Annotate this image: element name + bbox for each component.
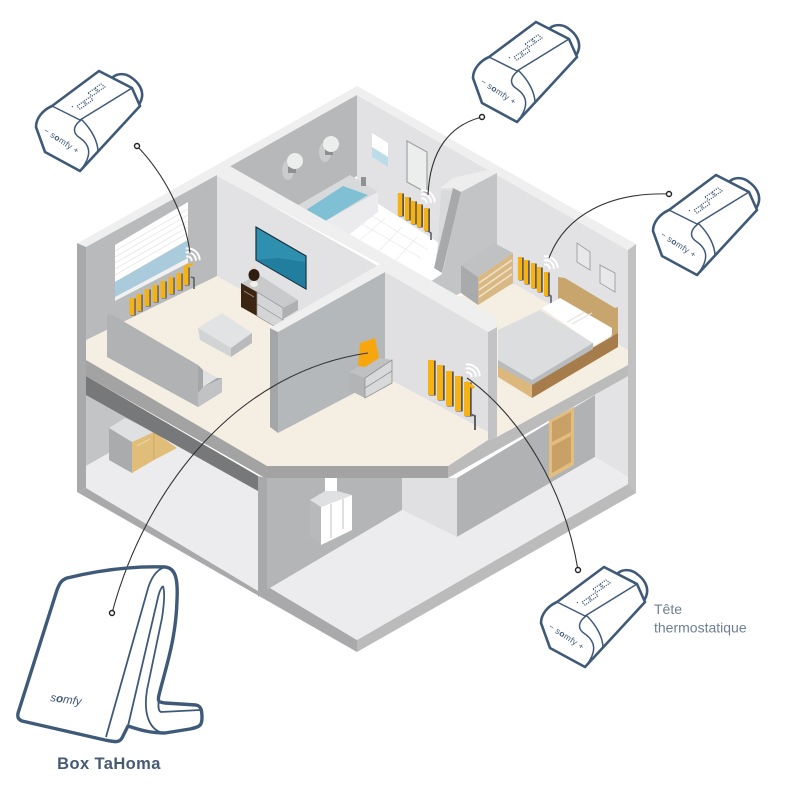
label: thermostatic head: thermostatique bbox=[654, 620, 747, 636]
icon: thermostatic head, top left bbox=[36, 71, 142, 171]
tv stand and lamp bbox=[241, 267, 298, 333]
bathroom window bbox=[372, 133, 388, 167]
lower storey bbox=[77, 375, 636, 652]
icon: TaHoma box: somfy bbox=[50, 692, 83, 709]
label: thermostatic head: Tête bbox=[654, 601, 682, 617]
bathtub bbox=[295, 175, 378, 237]
living room bbox=[86, 165, 497, 466]
label: Box TaHoma: Box TaHoma bbox=[57, 755, 161, 773]
kitchen cabinet bbox=[109, 418, 177, 473]
bedroom bbox=[427, 170, 628, 437]
bathroom bbox=[282, 133, 438, 278]
nightstand bbox=[349, 357, 392, 398]
icon: thermostatic head, right: − somfy + bbox=[659, 229, 698, 260]
boiler bbox=[310, 478, 352, 545]
sofa bbox=[107, 314, 222, 407]
chest of drawers bbox=[461, 243, 513, 305]
icon: thermostatic head, right bbox=[653, 175, 759, 275]
window with blind bbox=[115, 202, 188, 301]
wall lamps bbox=[282, 136, 339, 180]
bathroom floor tiles bbox=[345, 210, 438, 278]
floor slab bbox=[86, 360, 628, 491]
bedroom floor bbox=[450, 284, 628, 437]
icon: thermostatic head, bottom right: − somfy + bbox=[547, 621, 586, 652]
connector line: TaHoma box bbox=[110, 353, 368, 616]
slanted partition bbox=[427, 170, 497, 298]
icon: thermostatic head, bottom right bbox=[541, 567, 647, 667]
connector line: living room thermostat bbox=[134, 144, 190, 253]
bed bbox=[498, 277, 618, 398]
connector line: bathroom thermostat bbox=[428, 114, 484, 195]
icon: thermostatic head, top centre bbox=[473, 22, 579, 122]
living room floor bbox=[86, 276, 488, 466]
connector line: bedroom thermostat bbox=[549, 192, 672, 258]
ottoman bbox=[198, 313, 252, 357]
wifi signal: living room bbox=[183, 246, 202, 264]
television bbox=[256, 227, 306, 289]
mirror bbox=[407, 141, 427, 193]
wifi signal: bathroom bbox=[418, 188, 437, 206]
connector line: main room thermostat bbox=[467, 378, 580, 572]
picture frames bbox=[577, 243, 615, 292]
radiator: bedroom bbox=[520, 257, 551, 303]
back walls bbox=[227, 94, 628, 365]
wifi signal: bedroom bbox=[541, 254, 560, 272]
wifi signal: main room bbox=[463, 362, 482, 380]
radiator: main room bbox=[431, 360, 475, 430]
icon: thermostatic head, top left: − somfy + bbox=[42, 125, 81, 156]
radiator: bathroom bbox=[400, 193, 431, 240]
TaHoma box on nightstand bbox=[358, 338, 379, 367]
wall caps bbox=[77, 86, 636, 493]
door bbox=[549, 407, 574, 479]
house cutaway bbox=[77, 86, 636, 652]
icon: thermostatic head, top centre: − somfy + bbox=[479, 76, 518, 107]
icon: TaHoma box bbox=[18, 567, 202, 742]
interior partition wall bbox=[217, 165, 497, 440]
radiator: living room bbox=[132, 264, 194, 316]
